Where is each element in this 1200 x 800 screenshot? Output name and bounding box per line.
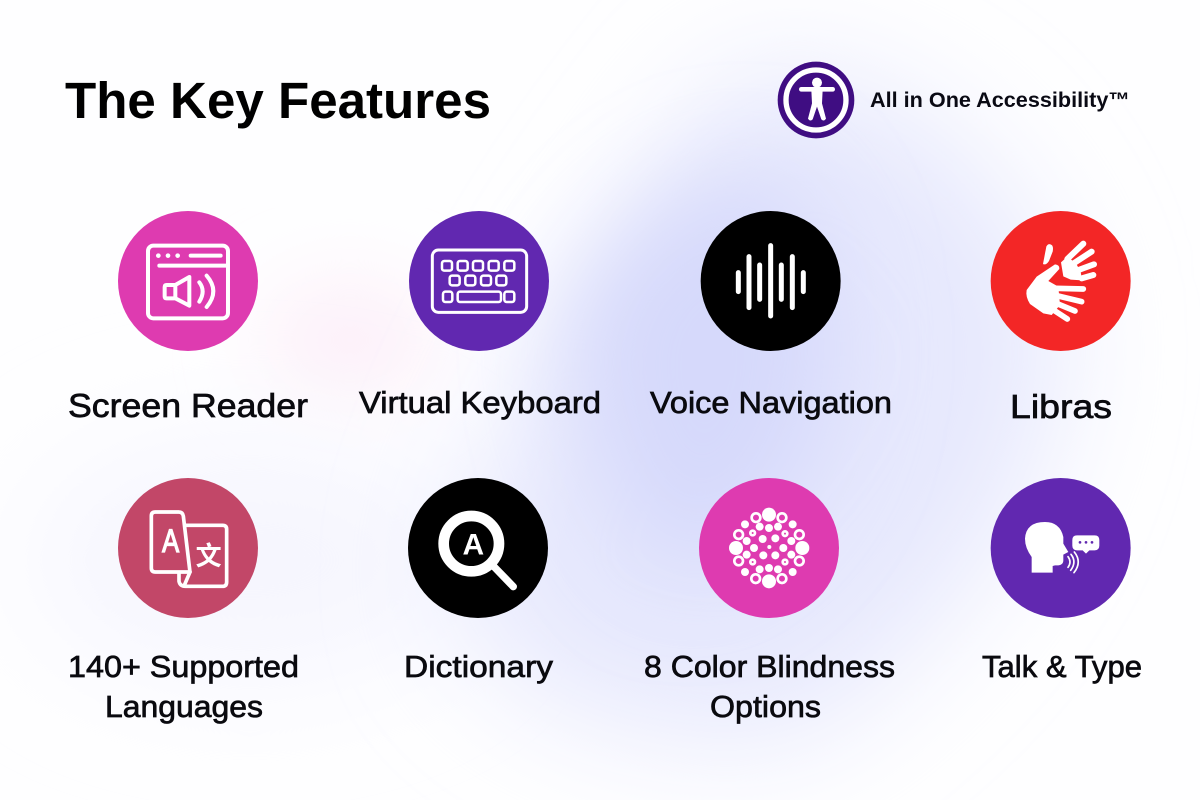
feature: 140+ Supported Languages: Languages [105, 689, 263, 724]
feature: Screen Reader [68, 211, 308, 424]
icon: translation pages: A [162, 523, 180, 560]
icon: signing hands [991, 211, 1131, 351]
feature: Voice Navigation [650, 211, 892, 420]
feature: Virtual Keyboard [359, 211, 601, 420]
icon: accessibility figure [778, 62, 854, 138]
icon: browser window with speaker [118, 211, 258, 351]
feature: Talk & Type [982, 478, 1142, 684]
feature: Libras [991, 211, 1131, 425]
icon: translation pages [118, 478, 258, 618]
title: The Key Features [65, 72, 491, 129]
label: Dictionary [404, 649, 554, 684]
icon: magnifier with letter [408, 478, 548, 618]
icon: magnifier with letter: A [462, 528, 484, 561]
feature: Dictionary [404, 478, 554, 684]
feature: 140+ Supported Languages [68, 478, 299, 724]
feature: 8 Color Blindness Options: Options [710, 689, 821, 724]
icon: keyboard [409, 211, 549, 351]
label: Voice Navigation [650, 385, 892, 420]
feature: 8 Color Blindness Options [644, 478, 895, 724]
label: Talk & Type [982, 649, 1142, 684]
label: Virtual Keyboard [359, 385, 601, 420]
label: Screen Reader [68, 387, 308, 424]
label: 8 Color Blindness [644, 649, 895, 684]
icon: sound wave [701, 211, 841, 351]
label: 140+ Supported [68, 649, 299, 684]
logo: All in One Accessibility [778, 62, 1130, 138]
icon: speaking head with bubble [991, 478, 1131, 618]
icon: translation pages: 文 [196, 541, 222, 571]
icon: colour dots [699, 478, 839, 618]
brand name: All in One Accessibility™ [870, 89, 1130, 112]
label: Libras [1010, 388, 1112, 425]
